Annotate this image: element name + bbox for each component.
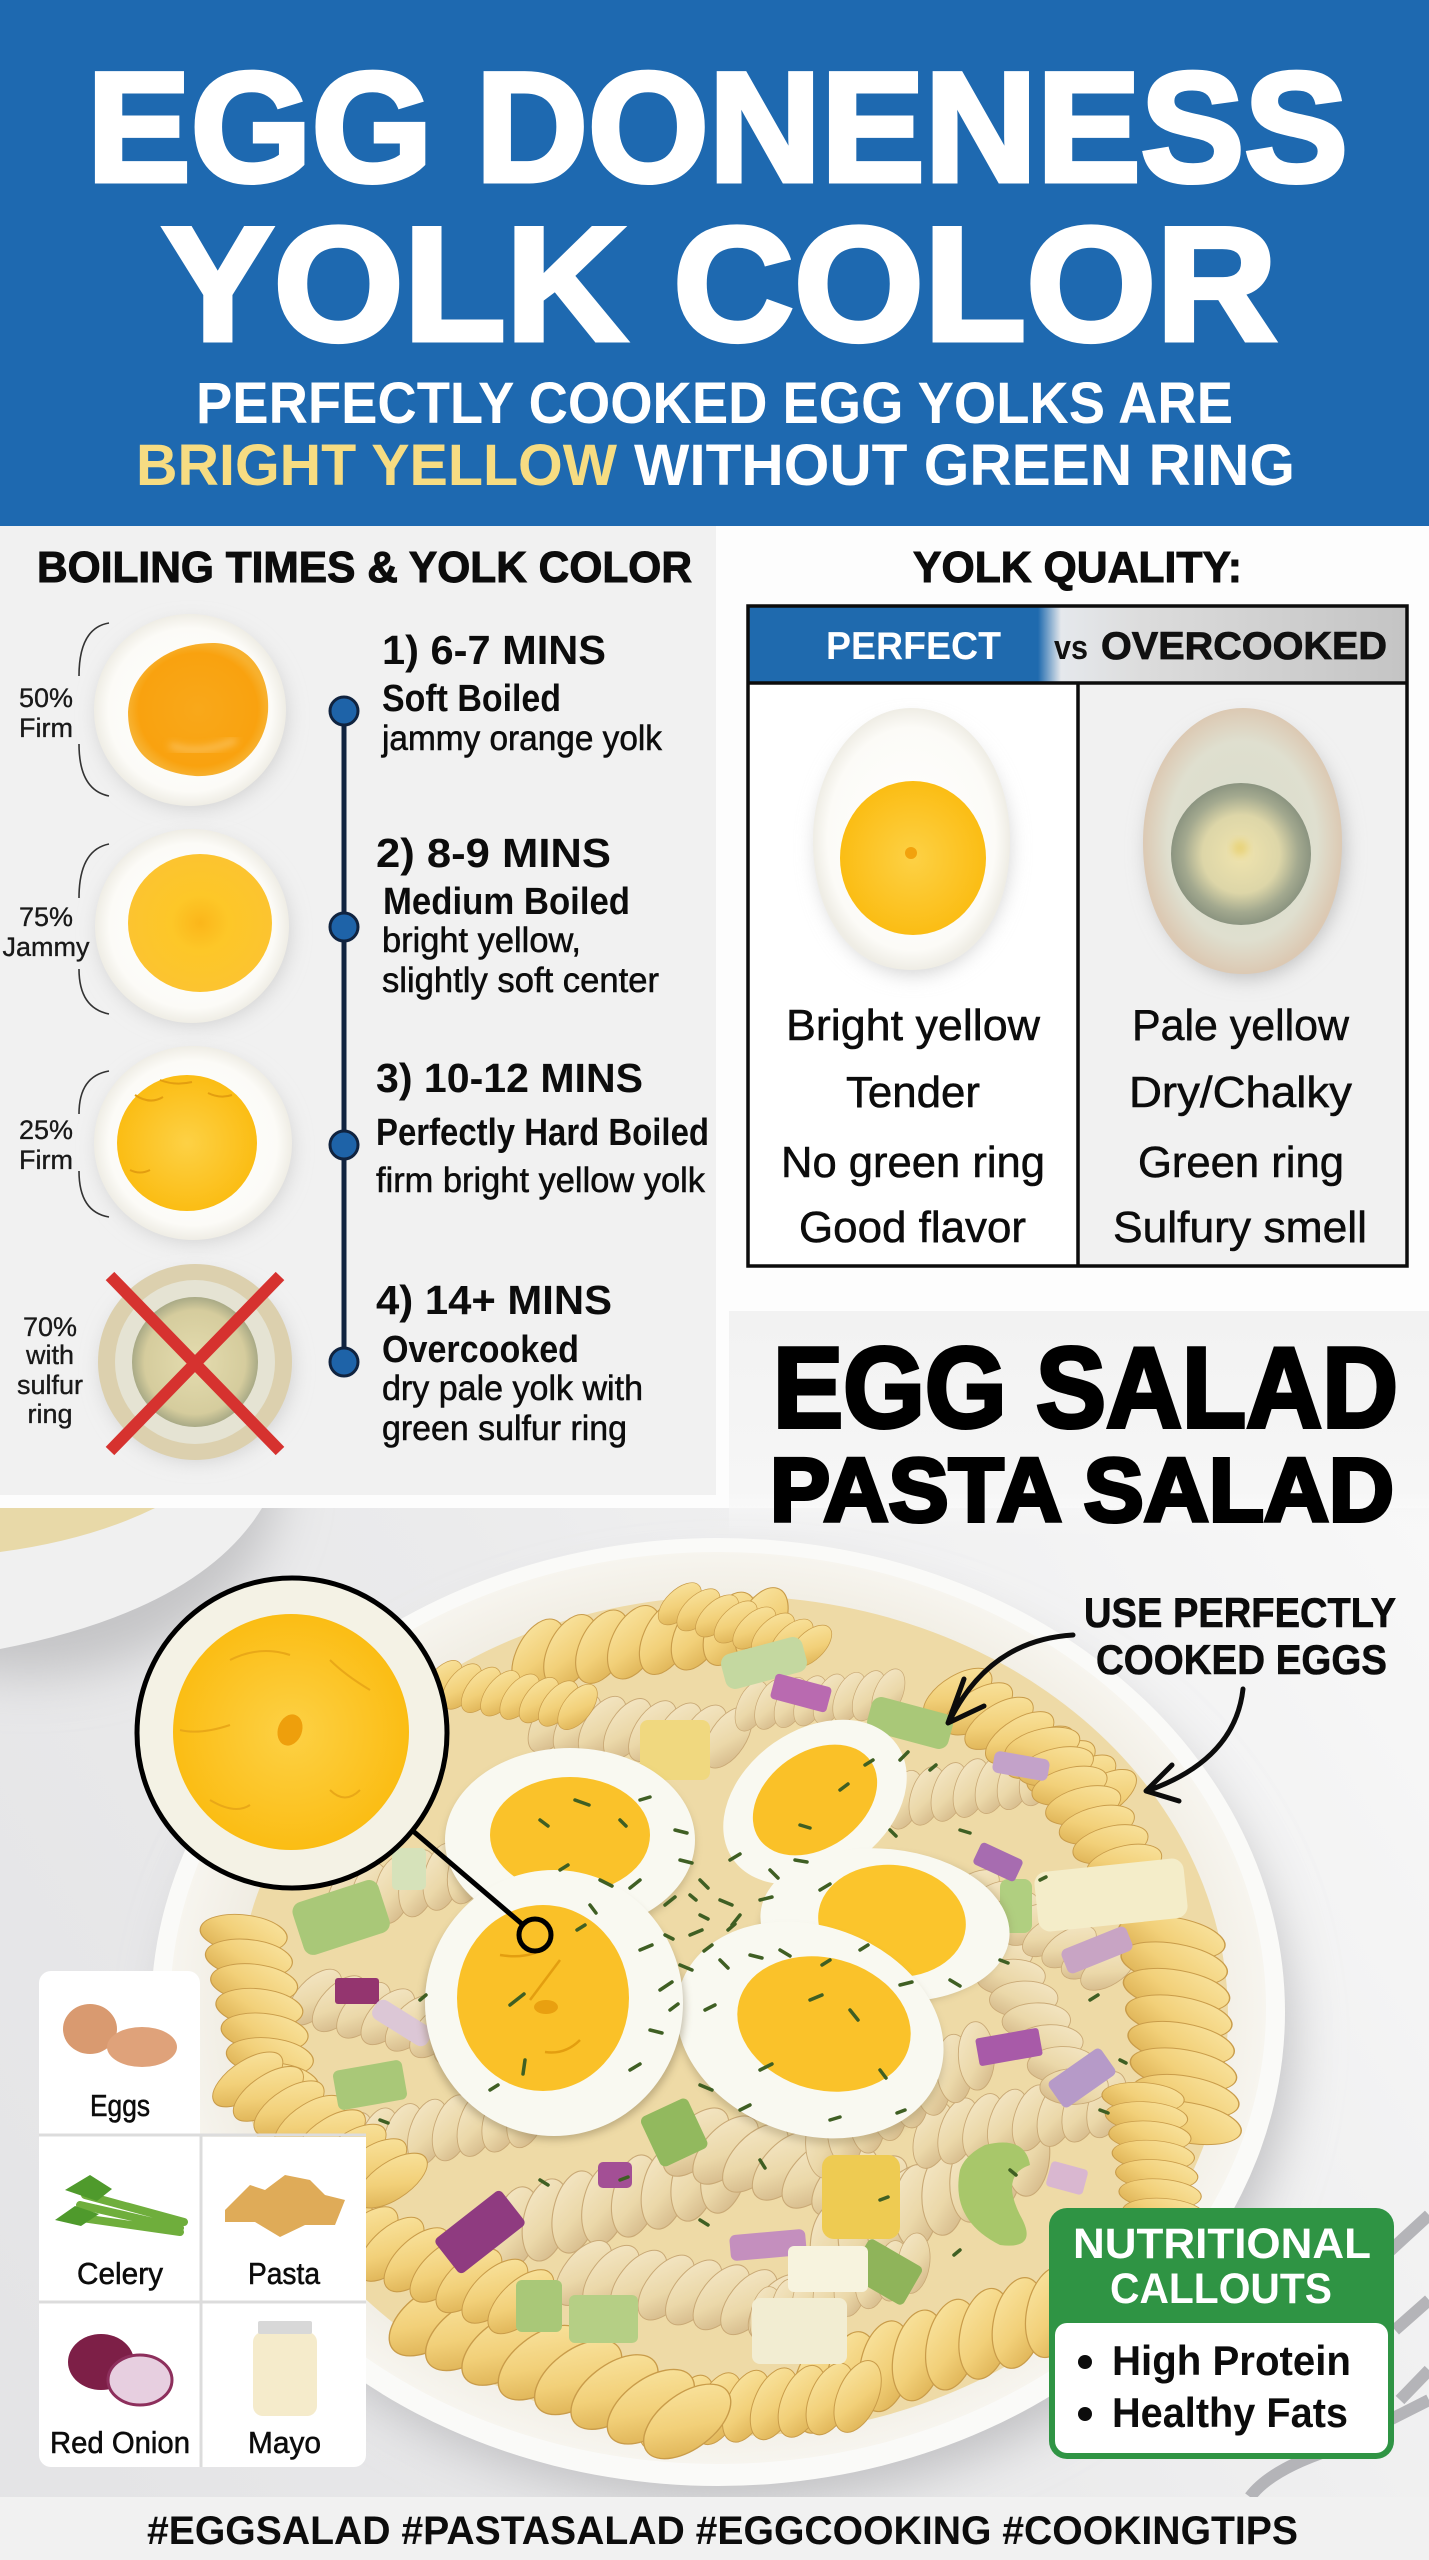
doneness labels: Firm bbox=[19, 713, 73, 743]
egg 4 overcooked with cross bbox=[98, 1264, 292, 1460]
timeline bbox=[330, 697, 358, 1376]
table header labels bbox=[826, 625, 1387, 668]
photo background bbox=[0, 1508, 1429, 2498]
use perfectly cooked eggs note: COOKED EGGS bbox=[1096, 1636, 1387, 1683]
stage 3 text bbox=[376, 1055, 709, 1200]
egg chunks bbox=[640, 1720, 1189, 2364]
boiling heading: BOILING TIMES & YOLK COLOR bbox=[37, 543, 692, 592]
subtitle bbox=[136, 371, 1295, 498]
panel: yolk quality bbox=[748, 543, 1407, 1266]
overcooked egg bbox=[1143, 708, 1344, 978]
fusilli pasta bbox=[187, 1568, 1255, 2492]
use perfectly cooked eggs note: USE PERFECTLY bbox=[1084, 1589, 1396, 1636]
overcooked attributes: Pale yellow bbox=[1132, 1001, 1349, 1050]
subtitle: BRIGHT YELLOW bbox=[136, 433, 617, 498]
doneness labels: Jammy bbox=[2, 932, 90, 962]
doneness labels: ring bbox=[27, 1399, 73, 1429]
title: YOLK COLOR bbox=[162, 194, 1277, 375]
callout list: Healthy Fats bbox=[1112, 2389, 1348, 2436]
brackets bbox=[79, 623, 109, 1217]
table header labels: PERFECT bbox=[826, 625, 1001, 668]
stage 4 text: green sulfur ring bbox=[382, 1409, 627, 1448]
perfect attributes: No green ring bbox=[781, 1138, 1045, 1187]
perfect attributes: Bright yellow bbox=[786, 1001, 1040, 1050]
perfect attributes bbox=[781, 1001, 1045, 1252]
stage 4 text: Overcooked bbox=[382, 1329, 579, 1371]
yolk quality heading: YOLK QUALITY: bbox=[913, 543, 1242, 592]
subtitle: PERFECTLY COOKED EGG YOLKS ARE bbox=[196, 371, 1233, 436]
subtitle: WITHOUT GREEN RING bbox=[634, 433, 1295, 498]
egg salad title bbox=[770, 1325, 1398, 1541]
perfect attributes: Tender bbox=[846, 1068, 980, 1117]
nutritional callouts bbox=[1049, 2208, 1394, 2459]
stage 4 text: dry pale yolk with bbox=[382, 1369, 643, 1408]
stage 2 text: slightly soft center bbox=[382, 961, 659, 1000]
salad bowl bbox=[151, 1538, 1290, 2502]
stage 3 text: Perfectly Hard Boiled bbox=[376, 1112, 709, 1154]
back bowl bbox=[0, 1508, 294, 1692]
stage 2 text: bright yellow, bbox=[382, 921, 581, 960]
stage 4 text: 4) 14+ MINS bbox=[376, 1277, 612, 1323]
stage 2 text: 2) 8-9 MINS bbox=[376, 830, 611, 876]
stage 2 text bbox=[376, 830, 659, 1000]
overcooked attributes: Dry/Chalky bbox=[1129, 1068, 1352, 1117]
header banner bbox=[0, 0, 1429, 526]
callout heading: CALLOUTS bbox=[1110, 2265, 1332, 2313]
stage 1 text: jammy orange yolk bbox=[381, 719, 662, 758]
stage 1 text: 1) 6-7 MINS bbox=[382, 627, 606, 673]
overcooked attributes bbox=[1113, 1001, 1367, 1252]
icon: mayo jar bbox=[253, 2321, 317, 2416]
callout heading: NUTRITIONAL bbox=[1073, 2220, 1371, 2268]
halved eggs bbox=[420, 1720, 1012, 2147]
stage 1 text bbox=[381, 627, 662, 758]
arrow to salad bbox=[948, 1635, 1073, 1723]
ingredient labels: Red Onion bbox=[50, 2425, 190, 2460]
callout list: High Protein bbox=[1112, 2337, 1351, 2384]
icon: pasta pile bbox=[225, 2175, 345, 2237]
ingredient labels: Celery bbox=[77, 2256, 163, 2291]
ingredient labels: Mayo bbox=[248, 2425, 321, 2460]
arrow to bowl bbox=[1146, 1689, 1243, 1801]
egg salad heading panel bbox=[729, 1311, 1429, 1541]
stage 4 text bbox=[376, 1277, 643, 1448]
perfect attributes: Good flavor bbox=[799, 1203, 1026, 1252]
footer hashtags bbox=[0, 2497, 1429, 2560]
use perfectly cooked eggs note bbox=[948, 1589, 1396, 1723]
icon: eggs bbox=[63, 2004, 177, 2067]
doneness labels: 25% bbox=[19, 1115, 73, 1145]
perfect egg bbox=[813, 708, 1010, 974]
doneness labels: Firm bbox=[19, 1145, 73, 1175]
egg 3 hard boiled bbox=[94, 1046, 292, 1241]
title: EGG DONENESS bbox=[87, 41, 1348, 215]
stage 1 text: Soft Boiled bbox=[382, 678, 561, 720]
ingredient labels: Pasta bbox=[248, 2256, 321, 2291]
egg 2 medium boiled bbox=[95, 829, 289, 1024]
magnifier callout bbox=[137, 1578, 551, 1951]
egg salad title: PASTA SALAD bbox=[770, 1441, 1394, 1541]
table header labels: vs bbox=[1054, 629, 1088, 667]
stage 3 text: 3) 10-12 MINS bbox=[376, 1055, 643, 1101]
egg 1 soft boiled bbox=[94, 614, 286, 808]
stage 2 text: Medium Boiled bbox=[383, 881, 630, 923]
icon: red onion bbox=[68, 2334, 172, 2405]
table header labels: OVERCOOKED bbox=[1101, 625, 1387, 668]
overcooked attributes: Green ring bbox=[1138, 1138, 1344, 1187]
celery pieces bbox=[290, 1635, 1032, 2343]
ingredient labels bbox=[50, 2088, 321, 2460]
stage 3 text: firm bright yellow yolk bbox=[376, 1161, 705, 1200]
doneness labels: 75% bbox=[19, 902, 73, 932]
red onion pieces bbox=[335, 1673, 1134, 2275]
doneness labels: with bbox=[25, 1340, 74, 1370]
doneness labels: 70% bbox=[23, 1312, 77, 1342]
parsley flecks bbox=[380, 1752, 1126, 2255]
icon: celery bbox=[55, 2175, 184, 2232]
doneness labels: sulfur bbox=[17, 1370, 83, 1400]
ingredient cards bbox=[39, 1971, 366, 2467]
callout list bbox=[1078, 2337, 1351, 2436]
footer hashtags: #EGGSALAD #PASTASALAD #EGGCOOKING #COOKINGTIPS bbox=[147, 2509, 1298, 2553]
comparison table bbox=[748, 606, 1407, 1266]
doneness labels bbox=[2, 683, 90, 1429]
doneness labels: 50% bbox=[19, 683, 73, 713]
overcooked attributes: Sulfury smell bbox=[1113, 1203, 1367, 1252]
title bbox=[87, 41, 1348, 375]
callout heading bbox=[1073, 2220, 1371, 2313]
fork bbox=[1250, 2215, 1429, 2497]
panel: boiling times bbox=[0, 526, 716, 1495]
ingredient labels: Eggs bbox=[90, 2088, 150, 2123]
